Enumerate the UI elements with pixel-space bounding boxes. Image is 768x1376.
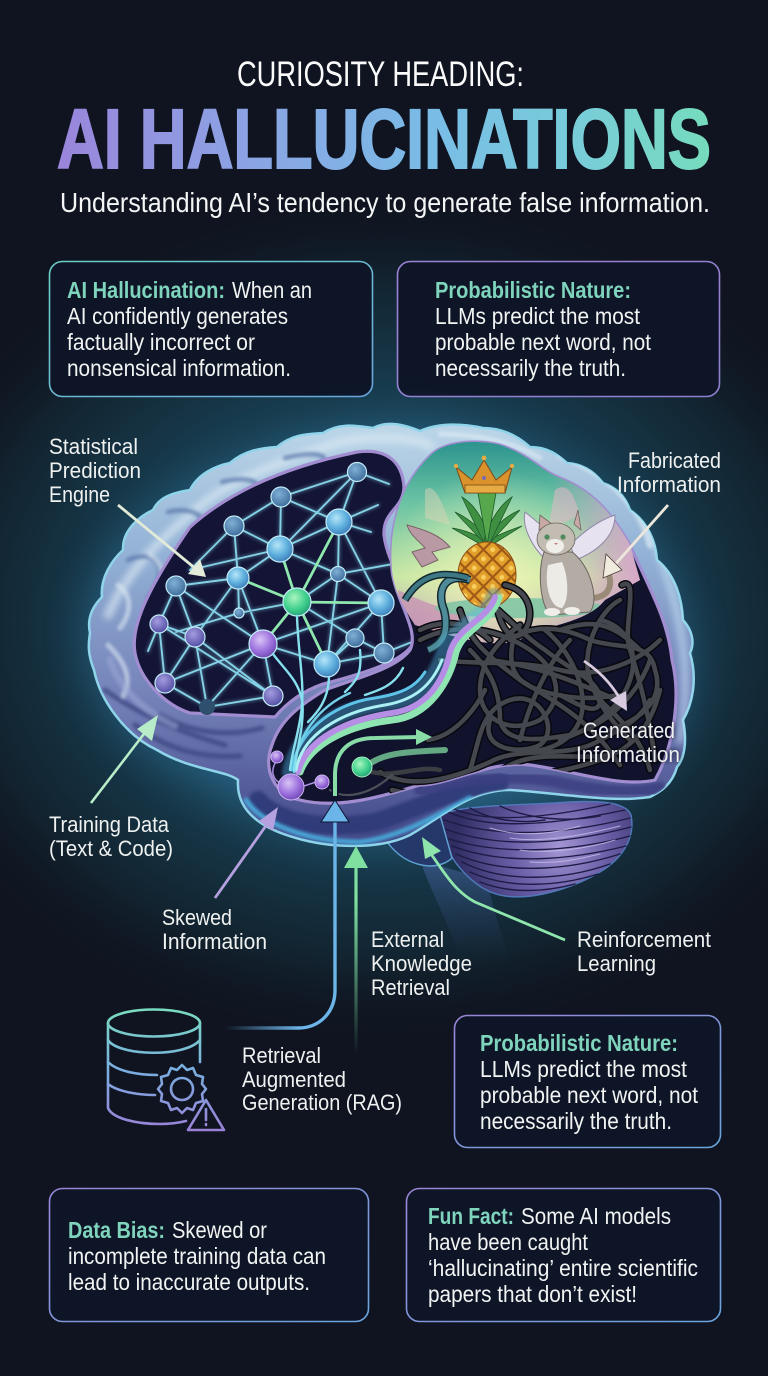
panel: Probabilistic Nature lower: necessarily the truth. [480,1108,672,1134]
panel: Probabilistic Nature top: Probabilistic Nature: [435,277,631,303]
title block [57,55,711,218]
icon: database with gear and warning [108,1010,224,1130]
label: external knowledge retrieval: Knowledge [371,951,472,976]
label: fabricated information: Information [617,472,721,497]
panel: Fun Fact: Fun Fact: [428,1203,514,1229]
panel: Fun Fact [406,1188,720,1322]
label: external knowledge retrieval: External [371,927,444,952]
arrow: fabricated information [603,505,668,578]
label: fabricated information [617,448,721,497]
panel: AI Hallucination definition: factually incorrect or [67,329,255,355]
crown [456,460,512,493]
arrow: internal green path [335,729,432,796]
panel: Probabilistic Nature top [398,262,720,396]
panel: Probabilistic Nature top: probable next word, not [435,329,652,355]
label: reinforcement learning [577,927,711,976]
highlighted green edges [238,522,381,664]
label: external knowledge retrieval [371,927,472,1000]
arrow: statistical prediction engine [118,505,206,577]
arrow: external knowledge [344,846,368,1055]
panel: AI Hallucination definition: When an [232,277,312,303]
label: reinforcement learning: Reinforcement [577,927,711,952]
arrow: training data [91,715,158,803]
label: statistical prediction engine: Prediction [49,458,141,483]
label: skewed information: Skewed [162,905,232,930]
label: statistical prediction engine: Statistical [49,434,138,459]
panel: Probabilistic Nature top: LLMs predict the most [435,303,641,329]
tangled wires [380,574,660,794]
hallucination scene [385,440,645,645]
label: training data: Training Data [49,812,170,837]
panel: Fun Fact: have been caught [428,1229,589,1255]
panel: Probabilistic Nature lower: LLMs predict the most [480,1056,688,1082]
winged cat [524,510,615,616]
brain outer shell [89,424,694,846]
panel: Fun Fact: ‘hallucinating’ entire scientific [428,1255,698,1281]
label: skewed information [162,905,267,954]
label: generated information: Generated [583,718,675,743]
label: generated information: Information [576,742,680,767]
strands from network down to the source [273,616,403,770]
cerebellum [435,801,632,897]
brain glow [92,429,685,838]
panel: Probabilistic Nature lower: Probabilistic Nature: [480,1030,678,1056]
panel: Data Bias [50,1188,368,1322]
panel: AI Hallucination definition [50,262,372,396]
label: RAG [242,1043,402,1115]
panel: AI Hallucination definition: AI Hallucination: [67,277,225,303]
arrow: skewed information [215,807,278,898]
stream source nodes [271,751,372,800]
panel: Data Bias: Data Bias: [68,1217,165,1243]
network nodes [150,462,394,715]
lower lobe under brain [383,815,452,866]
label: statistical prediction engine: Engine [49,482,110,507]
label: training data [49,812,173,861]
kicker heading: CURIOSITY HEADING: [237,55,524,94]
panel: Probabilistic Nature lower: probable next word, not [480,1082,699,1108]
arrow: reinforcement learning [422,837,565,940]
label: external knowledge retrieval: Retrieval [371,975,450,1000]
label: RAG: Augmented [242,1067,346,1092]
label: reinforcement learning: Learning [577,951,656,976]
arrow: RAG blue path [225,800,349,1028]
label: RAG: Retrieval [242,1043,321,1068]
panel: Fun Fact: Some AI models [521,1203,671,1229]
panel: Data Bias: Skewed or [172,1217,267,1243]
label: RAG: Generation (RAG) [242,1090,402,1115]
panel: neural network region [134,451,417,717]
panel: right hemisphere dark region [269,440,676,803]
data streams [290,596,499,795]
label: generated information: Generated [583,718,675,743]
panel: AI Hallucination definition: AI confidently generates [67,303,288,329]
label: fabricated information: Fabricated [628,448,721,473]
panel: Probabilistic Nature top: necessarily the truth. [435,355,626,381]
label: statistical prediction engine [49,434,141,507]
panel: Fun Fact: papers that don’t exist! [428,1281,637,1307]
panel: AI Hallucination definition: nonsensical information. [67,355,291,381]
network edges [148,472,415,707]
label: generated information: Information [576,742,680,767]
subtitle: Understanding AI’s tendency to generate false information. [60,187,710,218]
pineapple with crown [452,456,522,608]
arrow: generated information [584,661,627,711]
panel: Data Bias: incomplete training data can [68,1243,326,1269]
panel: Data Bias: lead to inaccurate outputs. [68,1269,310,1295]
brainstem [420,860,512,965]
panel: Probabilistic Nature lower [454,1016,720,1148]
label: generated information [576,718,680,767]
label: training data: (Text & Code) [49,836,173,861]
label: skewed information: Information [162,929,267,954]
